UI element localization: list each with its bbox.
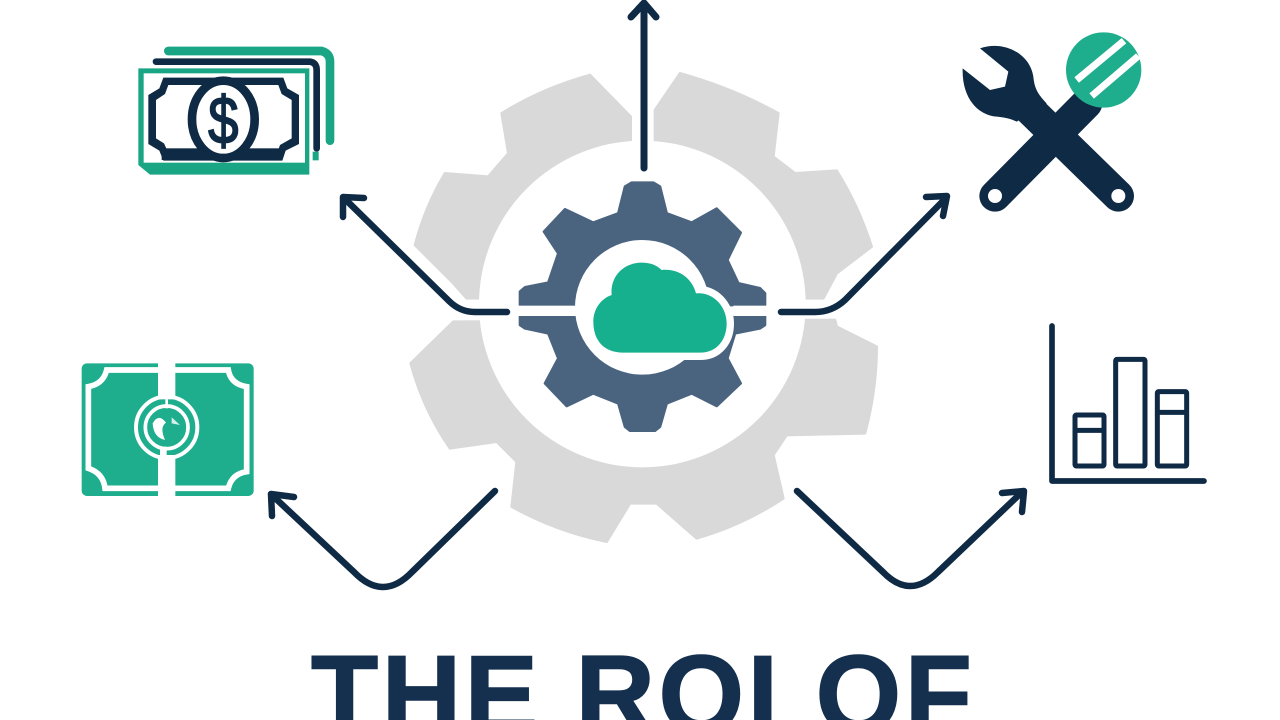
icon: bar chart [1052, 326, 1204, 481]
background grey gear [411, 73, 877, 542]
arrow: lower left [271, 491, 495, 587]
arrow: upper right [781, 196, 947, 312]
arrow: upper left [343, 197, 507, 312]
icon: split green banknote [82, 360, 254, 498]
arrow: top [631, 3, 656, 168]
dollar sign: $ [208, 83, 239, 158]
dark gear [518, 183, 767, 431]
central gear with cloud [518, 183, 767, 431]
screwdriver head [1066, 32, 1141, 108]
icon: stack of dollar bills [138, 48, 330, 175]
cloud [593, 263, 727, 353]
center split [158, 360, 175, 498]
arrow: lower right [797, 491, 1024, 586]
icon: wrench and screwdriver [963, 32, 1141, 203]
